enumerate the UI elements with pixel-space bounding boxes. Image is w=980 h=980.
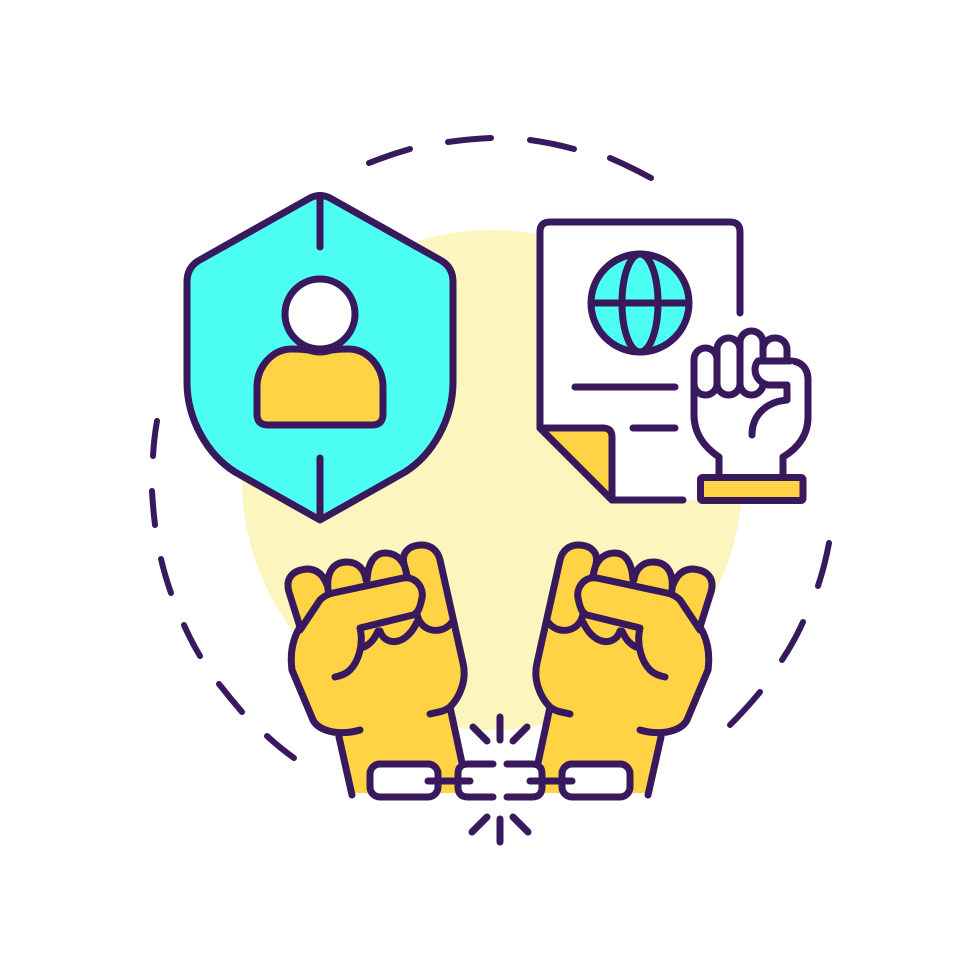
icon: document with globe (540, 222, 740, 500)
icon: left fist (288, 545, 464, 795)
broken left link (458, 764, 493, 797)
icon: right fist (536, 545, 712, 795)
icon: broken chain (370, 764, 630, 797)
text lines (575, 387, 675, 428)
broken right link (507, 764, 542, 797)
document page (540, 222, 740, 500)
person body (257, 349, 383, 425)
dashed circle ring (152, 138, 829, 758)
right chain link (562, 764, 630, 797)
background pale yellow circle (242, 230, 742, 730)
inner finger curves (364, 614, 452, 647)
thumb (754, 361, 800, 400)
icon: small raised fist on base (694, 331, 808, 500)
icon: shield with person (187, 196, 453, 520)
shield body (187, 196, 453, 520)
thumb (578, 578, 700, 677)
person head (285, 279, 355, 349)
globe (591, 254, 689, 352)
fist fill (288, 545, 464, 793)
palm (694, 361, 808, 477)
connectors (428, 778, 572, 784)
left chain link (370, 764, 438, 797)
fist outline (288, 545, 464, 795)
fingers (694, 348, 717, 395)
fist fill (536, 545, 712, 793)
thumb (300, 578, 422, 677)
inner finger curves (548, 614, 636, 647)
base (700, 478, 803, 500)
shield ticks (316, 198, 324, 518)
folded corner (540, 428, 612, 500)
fist outline (536, 545, 712, 795)
icon: break sparks (472, 717, 528, 842)
